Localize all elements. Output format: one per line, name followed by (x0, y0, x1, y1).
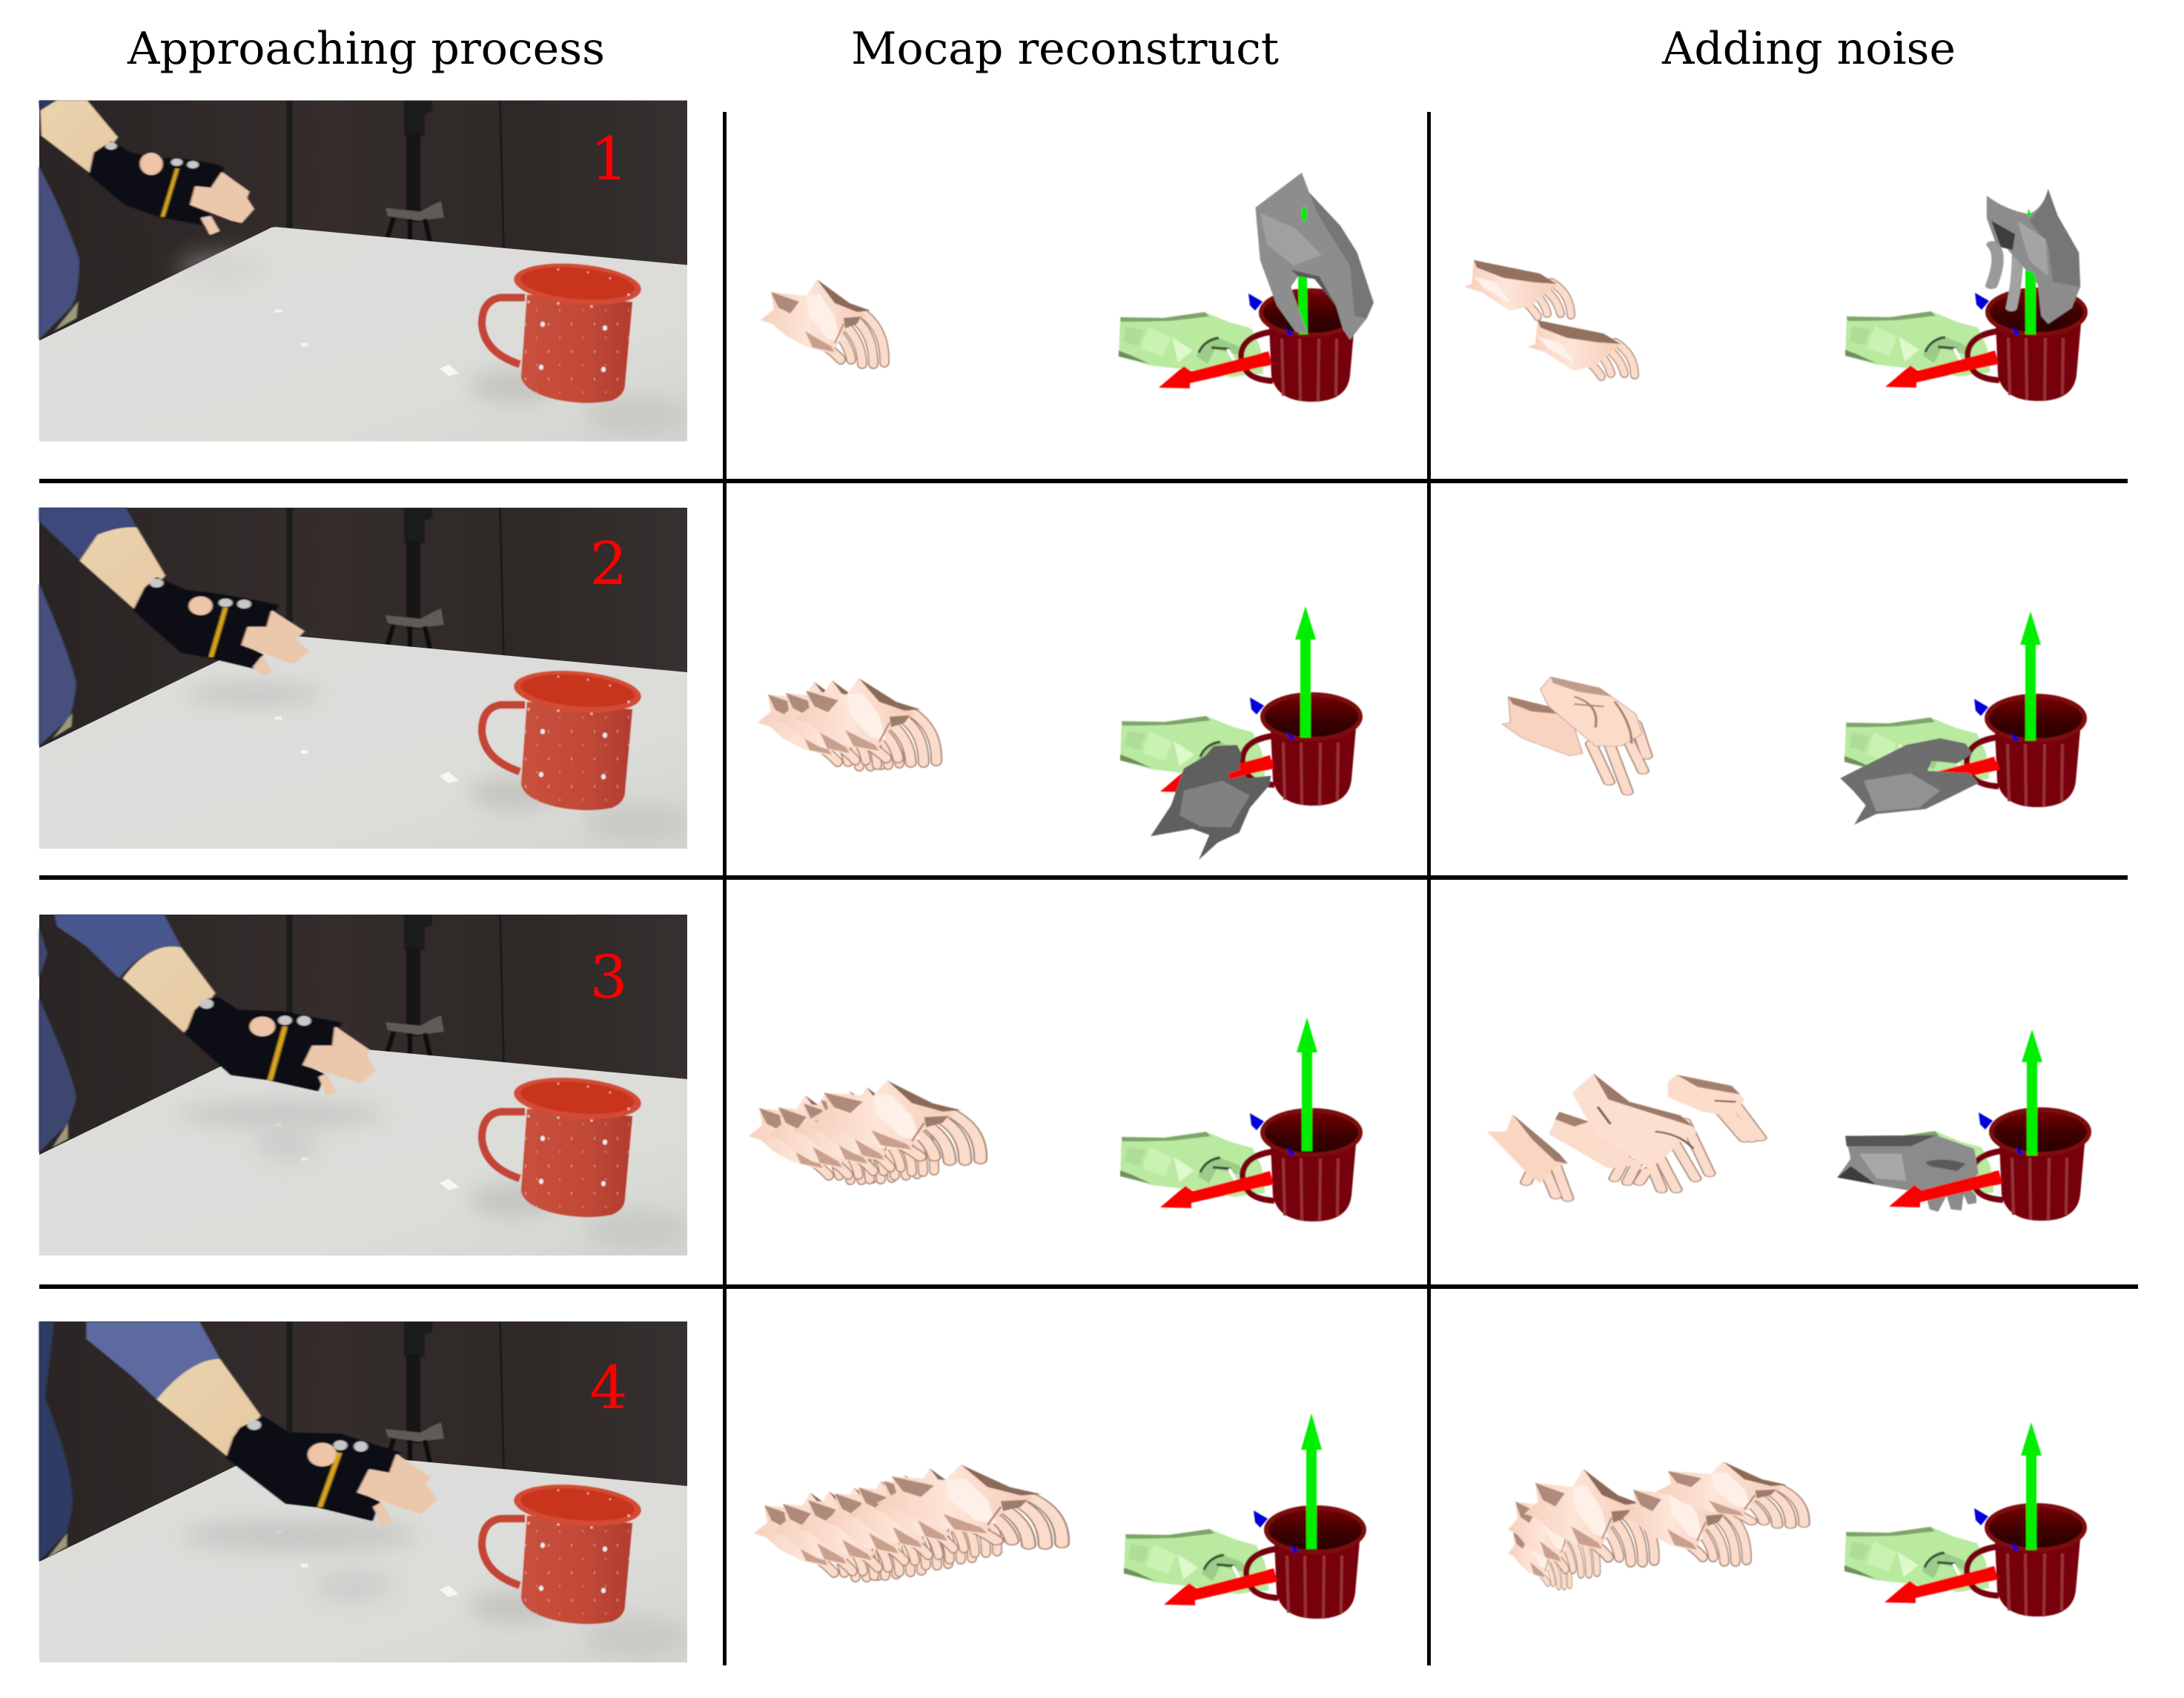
mug with green reference hand and axes (1119, 291, 1359, 402)
approach hand sequence (749, 1081, 981, 1180)
gray noisy hand (1840, 738, 2000, 825)
noise row 3 (1487, 1029, 2089, 1221)
mug with green reference hand and axes (1120, 694, 1360, 806)
noisy approach hands (1508, 1462, 1804, 1586)
green axis arrow (1301, 1413, 1322, 1549)
gray noisy hand (1987, 189, 2080, 324)
gray target hand (1255, 173, 1374, 340)
approach hand sequence (754, 1465, 1062, 1577)
approach hand sequence (758, 678, 936, 766)
mug with green reference hand and axes (1845, 290, 2085, 401)
noisy approach hands (1502, 677, 1647, 792)
photo 4 person arm and glove (39, 1321, 436, 1603)
mocap row 2 (758, 606, 1360, 860)
step number 1: 1 (591, 125, 628, 193)
gray noisy hand (1837, 1135, 1979, 1212)
noise row 4 (1508, 1422, 2085, 1616)
step number 4: 4 (590, 1353, 627, 1422)
green axis arrow (2025, 271, 2036, 334)
mug with green reference hand and axes (1849, 1110, 2089, 1221)
noisy approach hands (1487, 1073, 1761, 1198)
noise row 1 (1464, 189, 2085, 401)
red axis arrow (1889, 1170, 2002, 1207)
photo panel: step 3 (39, 915, 688, 1256)
green axis arrow (1297, 1018, 1317, 1151)
mocap row 3 (749, 1018, 1360, 1221)
noise row 2 (1502, 611, 2085, 825)
photo panel: step 4 (39, 1321, 688, 1662)
approach hand sequence (761, 279, 884, 364)
mug with green reference hand and axes (1120, 1110, 1360, 1221)
column title: Mocap reconstruct: Mocap reconstruct (851, 23, 1279, 75)
photo panel: step 1 (39, 100, 688, 442)
photo 3 person arm and glove (39, 915, 385, 1164)
mocap row 1 (761, 173, 1374, 402)
green axis arrow (1298, 208, 1308, 334)
step number 2: 2 (590, 529, 627, 598)
step number 3: 3 (590, 943, 627, 1012)
mocap row 4 (754, 1413, 1364, 1619)
green axis arrow (2021, 1422, 2042, 1550)
noisy approach hands (1464, 260, 1635, 377)
green axis arrow (2020, 611, 2041, 740)
photo 2 person arm and glove (39, 508, 322, 746)
mug with green reference hand and axes (1844, 696, 2085, 807)
mug with green reference hand and axes (1124, 1508, 1364, 1619)
photo panel: step 2 (39, 508, 688, 849)
gray target hand (1151, 745, 1274, 860)
green axis arrow (2022, 1029, 2042, 1155)
photo 1 person arm and glove (39, 101, 267, 340)
column title: Approaching process: Approaching process (127, 23, 605, 75)
mug with green reference hand and axes (1844, 1505, 2085, 1616)
green axis arrow (1295, 606, 1316, 737)
column title: Adding noise: Adding noise (1661, 23, 1956, 75)
